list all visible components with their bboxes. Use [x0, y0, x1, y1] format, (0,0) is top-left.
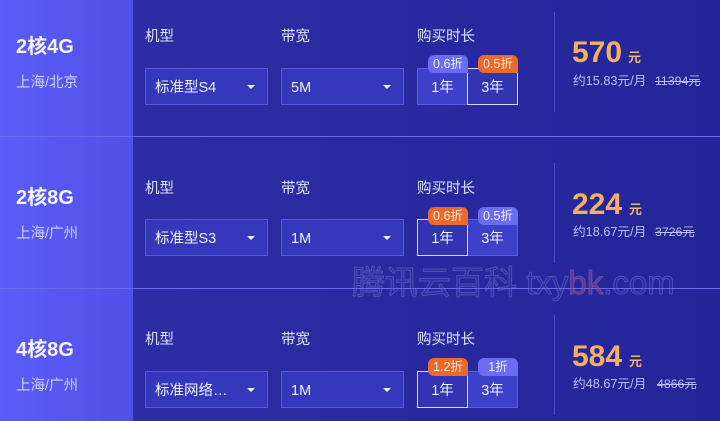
- button: 3 years: 3年: [481, 383, 504, 399]
- label: model: 机型: [145, 332, 174, 348]
- original price: 3726元: [655, 225, 695, 239]
- monthly price: 约15.83元/月: [573, 74, 646, 88]
- dropdown: model: [145, 371, 268, 408]
- dropdown: bandwidth: 1M: [291, 231, 311, 247]
- button: 3 years: [467, 68, 518, 105]
- badge: 0.6 discount: 0.6折: [433, 209, 463, 223]
- dropdown: bandwidth: [281, 68, 404, 105]
- row: 2核8G: [16, 163, 695, 263]
- vertical divider: [554, 315, 555, 415]
- vertical divider: [554, 163, 555, 263]
- label: bandwidth: 带宽: [281, 332, 310, 348]
- watermark: 腾讯云百科 txybk.com: [352, 264, 675, 301]
- label: duration: 购买时长: [417, 332, 475, 348]
- price unit: 元: [628, 50, 641, 65]
- button: 1 year: [417, 219, 468, 256]
- badge: 0.6 discount: 0.6折: [433, 57, 463, 71]
- label: duration: 购买时长: [417, 29, 475, 45]
- dropdown: model: 标准型S3: [155, 231, 216, 247]
- original price: 4866元: [657, 377, 697, 391]
- vertical divider: [554, 12, 555, 112]
- label: model: 机型: [145, 29, 174, 45]
- button: 1 year: 1年: [431, 80, 454, 96]
- label: bandwidth: 带宽: [281, 29, 310, 45]
- dropdown: bandwidth: 5M: [291, 80, 311, 96]
- badge: 1 discount: 1折: [488, 360, 508, 374]
- price: 570: [572, 36, 622, 69]
- row: 2核4G: [16, 12, 701, 112]
- price unit: 元: [629, 202, 642, 217]
- button: 3 years: [467, 219, 518, 256]
- heading: 2核4G: 2核4G: [16, 36, 74, 58]
- button: 3 years: 3年: [481, 80, 504, 96]
- region text: 上海/广州: [16, 378, 78, 394]
- badge: 0.5 discount: 0.5折: [483, 57, 513, 71]
- left side panel: [0, 0, 133, 421]
- row: 4核8G: [16, 315, 697, 415]
- dropdown: bandwidth: [281, 219, 404, 256]
- price: 584: [572, 340, 622, 373]
- price unit: 元: [629, 354, 642, 369]
- dropdown: bandwidth: [281, 371, 404, 408]
- heading: 4核8G: 4核8G: [16, 339, 74, 361]
- dropdown: model: 标准网络…: [155, 383, 228, 399]
- label: model: 机型: [145, 181, 174, 197]
- badge: 1 discount: [478, 358, 518, 376]
- dropdown: model: 标准型S4: [155, 80, 216, 96]
- button: 3 years: 3年: [481, 231, 504, 247]
- label: duration: 购买时长: [417, 181, 475, 197]
- dropdown: model: [145, 219, 268, 256]
- button: 3 years: [467, 371, 518, 408]
- badge: 0.6 discount: [428, 55, 468, 73]
- button: 1 year: 1年: [431, 231, 454, 247]
- badge: 0.5 discount: 0.5折: [483, 209, 513, 223]
- dropdown: model: [145, 68, 268, 105]
- badge: 0.5 discount: [478, 55, 518, 73]
- badge: 1.2 discount: [428, 358, 468, 376]
- region text: 上海/北京: [16, 75, 78, 91]
- dropdown: bandwidth: 1M: [291, 383, 311, 399]
- badge: 0.6 discount: [428, 207, 468, 225]
- badge: 1.2 discount: 1.2折: [433, 360, 463, 374]
- row divider 2: [0, 288, 720, 289]
- price: 224: [572, 188, 622, 221]
- monthly price: 约48.67元/月: [573, 377, 646, 391]
- heading: 2核8G: 2核8G: [16, 187, 74, 209]
- region text: 上海/广州: [16, 226, 78, 242]
- button: 1 year: [417, 68, 468, 105]
- row divider 1: [0, 136, 720, 137]
- original price: 11394元: [655, 74, 701, 88]
- badge: 0.5 discount: [478, 207, 518, 225]
- label: bandwidth: 带宽: [281, 181, 310, 197]
- monthly price: 约18.67元/月: [573, 225, 646, 239]
- button: 1 year: 1年: [431, 383, 454, 399]
- button: 1 year: [417, 371, 468, 408]
